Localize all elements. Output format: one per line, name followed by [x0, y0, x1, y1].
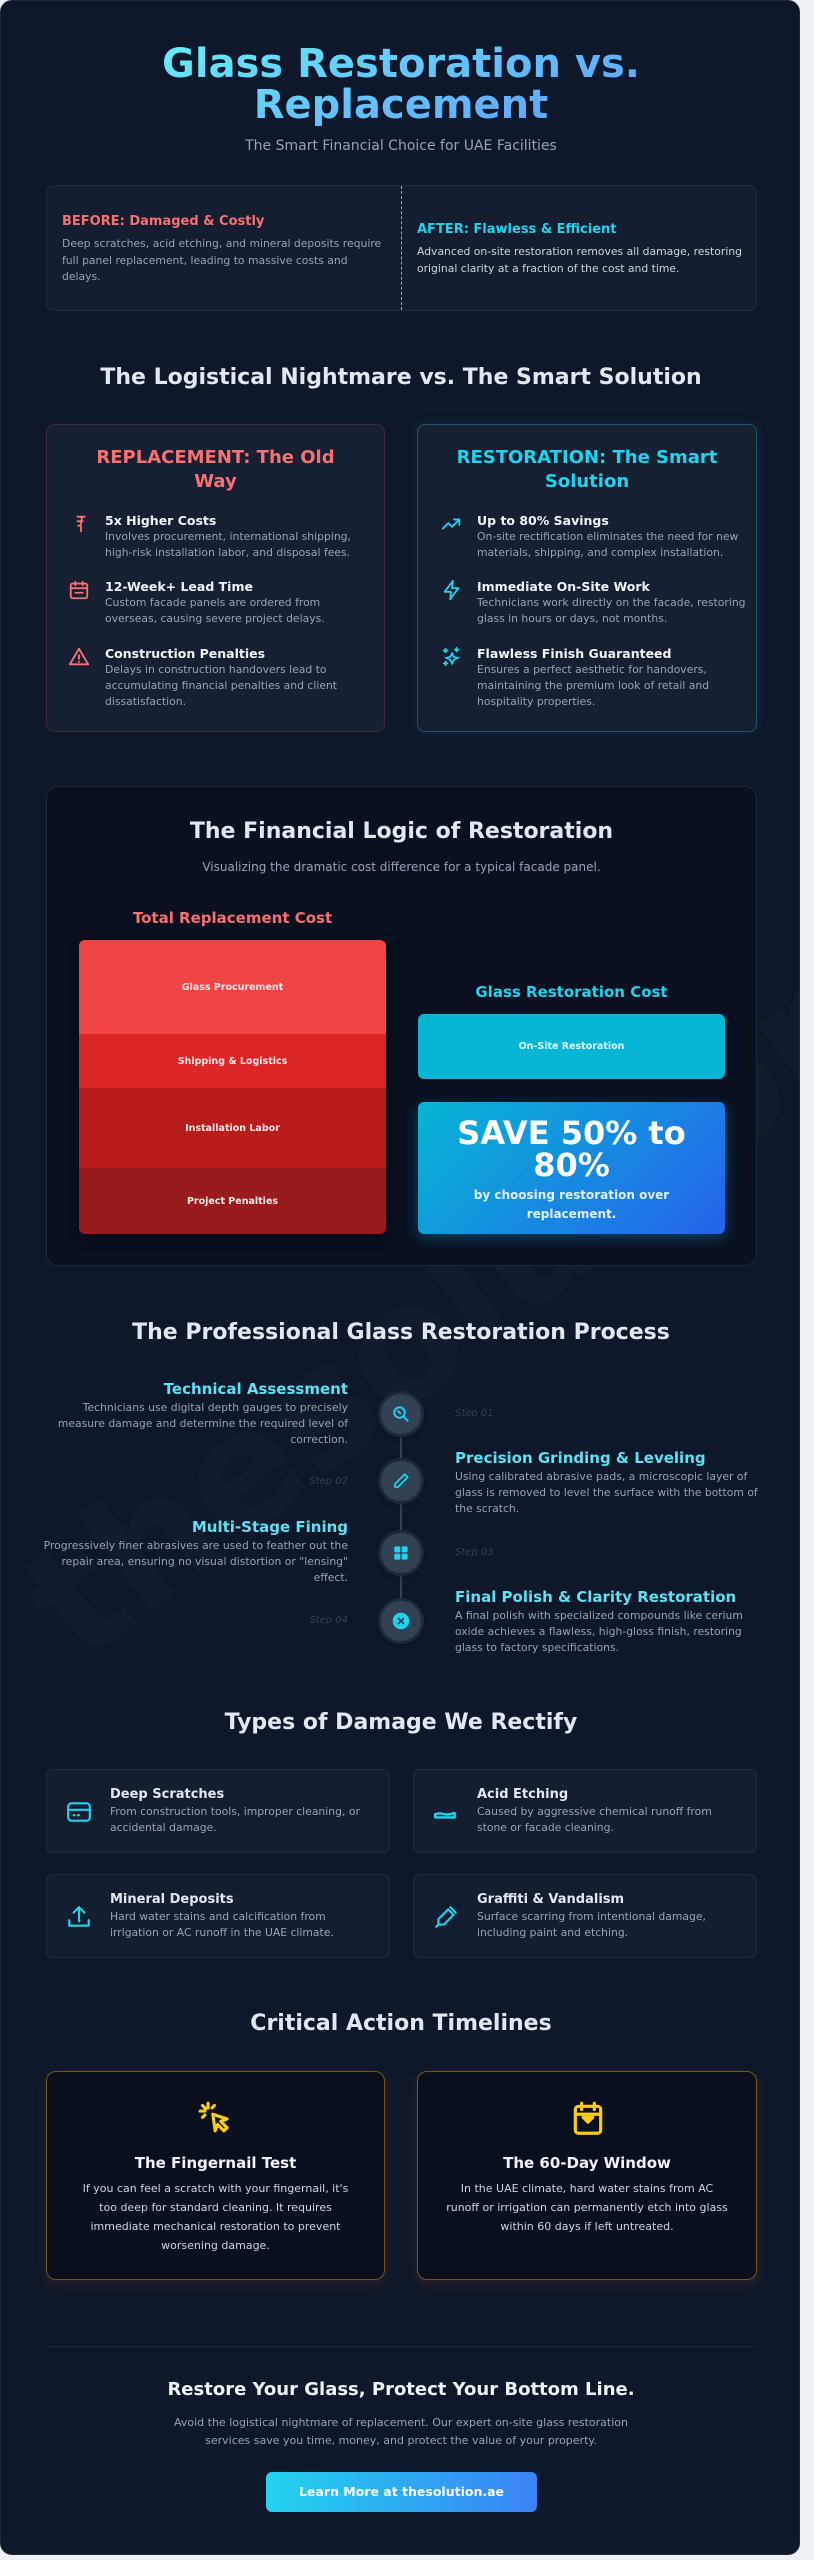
- card: mineral deposits: Mineral Deposits: [110, 1892, 234, 1907]
- item: finish: Ensures a perfect aesthetic for handovers, maintaining the premium look of retail and hospitality properties.: [477, 663, 709, 708]
- step 3 text: Progressively finer abrasives are used to feather out the repair area, ensuring no visual distortion or "lensing" effect.: [44, 1539, 348, 1584]
- step 3 icon: [381, 1533, 421, 1573]
- card: mineral deposits: Hard water stains and calcification from irrigation or AC runoff in the UAE climate.: [110, 1910, 334, 1939]
- item: cost: 5x Higher Costs: [105, 513, 216, 528]
- step 1 text: [58, 1380, 348, 1446]
- item: on-site: Technicians work directly on the facade, restoring glass in hours or days, not months.: [477, 596, 746, 625]
- subtitle: The Smart Financial Choice for UAE Facilities: [245, 138, 557, 154]
- label: restoration cost: Glass Restoration Cost: [475, 983, 668, 1001]
- card: deep scratches: From construction tools, improper cleaning, or accidental damage.: [110, 1805, 360, 1834]
- chart: restoration bar: [418, 1014, 725, 1079]
- item: penalties: Construction Penalties: [105, 646, 265, 661]
- card: deep scratches: Deep Scratches: [110, 1787, 224, 1802]
- before text: [62, 214, 381, 283]
- chart: replacement stack: [79, 940, 386, 1234]
- button: Learn More at thesolution.ae: [299, 2484, 504, 2499]
- card: mineral deposits: [46, 1874, 390, 1958]
- label: total replacement: Total Replacement Cost: [133, 909, 332, 927]
- panel heading: REPLACEMENT: The Old: [96, 447, 335, 468]
- card: fingernail test: If you can feel a scratch with your fingernail, it's too deep for standard cleaning. It requires immediate mechanical restoration to prevent worsening damage.: [83, 2182, 348, 2252]
- item: on-site: Immediate On-Site Work: [477, 579, 650, 594]
- panel: before/after: [46, 185, 757, 311]
- card: 60-day window: The 60-Day Window: [503, 2154, 671, 2172]
- card: fingernail test: The Fingernail Test: [135, 2154, 296, 2172]
- footer text: Avoid the logistical nightmare of replacement. Our expert on-site glass restoration services save you time, money, and protect the value of your property.: [174, 2416, 628, 2447]
- panel heading: Solution: [545, 471, 629, 492]
- callout: save: replacement.: [527, 1207, 616, 1221]
- step 3 text: [44, 1518, 348, 1584]
- chart: replacement stack: Installation Labor: [185, 1122, 280, 1134]
- panel heading: RESTORATION: The Smart: [457, 447, 717, 468]
- divider dashed: [401, 186, 402, 310]
- item: savings: Up to 80% Savings: [477, 513, 609, 528]
- card: graffiti: Graffiti & Vandalism: [477, 1892, 624, 1907]
- chart: replacement stack: Project Penalties: [187, 1196, 278, 1206]
- item: finish: Flawless Finish Guaranteed: [477, 646, 671, 661]
- step 4 text: Final Polish & Clarity Restoration: [455, 1588, 736, 1606]
- item: cost: [76, 513, 351, 559]
- card: acid etching: [413, 1769, 757, 1853]
- step 4 text: [455, 1588, 743, 1654]
- title: [1, 44, 801, 126]
- step 1 text: Technicians use digital depth gauges to precisely measure damage and determine the required level of correction.: [58, 1401, 348, 1446]
- step 4 text: A final polish with specialized compounds like cerium oxide achieves a flawless, high-gloss finish, restoring glass to factory specifications.: [455, 1609, 743, 1654]
- timeline line: [400, 1414, 402, 1621]
- step 2 icon: [381, 1461, 421, 1501]
- chart: restoration bar: On-Site Restoration: [519, 1041, 624, 1052]
- step 1 icon: [381, 1394, 421, 1434]
- heading: logistical: The Logistical Nightmare vs. The Smart Solution: [100, 365, 702, 390]
- heading: damage types: Types of Damage We Rectify: [225, 1710, 577, 1735]
- callout: save: 80%: [533, 1146, 610, 1184]
- card: 60-day window: [417, 2071, 757, 2280]
- title: Glass Restoration vs.: [162, 41, 640, 87]
- panel: replacement: [46, 424, 385, 732]
- step 2 text: Using calibrated abrasive pads, a microscopic layer of glass is removed to level the surface with the bottom of the scratch.: [455, 1470, 758, 1515]
- card: graffiti: Surface scarring from intentional damage, including paint and etching.: [477, 1910, 706, 1939]
- after text: AFTER: Flawless & Efficient: [417, 222, 617, 237]
- button: [266, 2472, 537, 2512]
- card: graffiti: [413, 1874, 757, 1958]
- step 1 label: Step 01: [455, 1408, 494, 1419]
- panel heading: [96, 447, 335, 492]
- callout: save: SAVE 50% to: [457, 1114, 686, 1152]
- item: savings: [442, 513, 738, 559]
- step 3 text: Multi-Stage Fining: [192, 1518, 348, 1536]
- chart: replacement stack: Shipping & Logistics: [178, 1056, 287, 1066]
- subtitle: Visualizing the dramatic cost difference for a typical facade panel.: [202, 860, 601, 874]
- callout: save: [418, 1102, 725, 1234]
- step 4 icon: [381, 1601, 421, 1641]
- heading: The Financial Logic of Restoration: [190, 819, 613, 844]
- divider: [46, 2346, 757, 2347]
- item: lead time: Custom facade panels are ordered from overseas, causing severe project delays.: [105, 596, 325, 625]
- item: penalties: [68, 646, 337, 708]
- chart: replacement stack: Glass Procurement: [182, 982, 283, 992]
- item: cost: Involves procurement, international shipping, high-risk installation labor, and disposal fees.: [105, 530, 351, 559]
- card: 60-day window: In the UAE climate, hard water stains from AC runoff or irrigation can permanently etch into glass within 60 days if left untreated.: [446, 2182, 728, 2233]
- after text: Advanced on-site restoration removes all damage, restoring original clarity at a fraction of the cost and time.: [417, 245, 742, 274]
- callout: save: by choosing restoration over: [474, 1188, 669, 1202]
- item: on-site: [444, 579, 746, 625]
- step 3 label: Step 03: [455, 1547, 494, 1558]
- title: Replacement: [254, 82, 548, 128]
- panel: financial logic: [46, 786, 757, 1266]
- step 2 label: Step 02: [309, 1476, 348, 1487]
- panel: restoration: [417, 424, 757, 732]
- card: acid etching: Acid Etching: [477, 1787, 568, 1802]
- footer heading: Restore Your Glass, Protect Your Bottom Line.: [167, 2379, 635, 2400]
- heading: process: The Professional Glass Restoration Process: [132, 1320, 670, 1345]
- card: acid etching: Caused by aggressive chemical runoff from stone or facade cleaning.: [477, 1805, 712, 1834]
- panel heading: [457, 447, 717, 492]
- item: savings: On-site rectification eliminates the need for new materials, shipping, and complex installation.: [477, 530, 738, 559]
- item: lead time: 12-Week+ Lead Time: [105, 579, 253, 594]
- step 4 label: Step 04: [309, 1615, 348, 1626]
- before text: Deep scratches, acid etching, and mineral deposits require full panel replacement, leading to massive costs and delays.: [62, 237, 381, 283]
- after text: [417, 222, 742, 274]
- before text: BEFORE: Damaged & Costly: [62, 214, 264, 229]
- step 1 text: Technical Assessment: [164, 1380, 348, 1398]
- item: lead time: [70, 579, 325, 625]
- panel heading: Way: [194, 471, 237, 492]
- item: penalties: Delays in construction handovers lead to accumulating financial penalties and client dissatisfaction.: [105, 663, 337, 708]
- card: fingernail test: [46, 2071, 385, 2280]
- step 2 text: Precision Grinding & Leveling: [455, 1449, 706, 1467]
- item: finish: [442, 646, 709, 708]
- heading: critical timelines: Critical Action Timelines: [250, 2011, 552, 2036]
- step 2 text: [455, 1449, 758, 1515]
- card: deep scratches: [46, 1769, 390, 1853]
